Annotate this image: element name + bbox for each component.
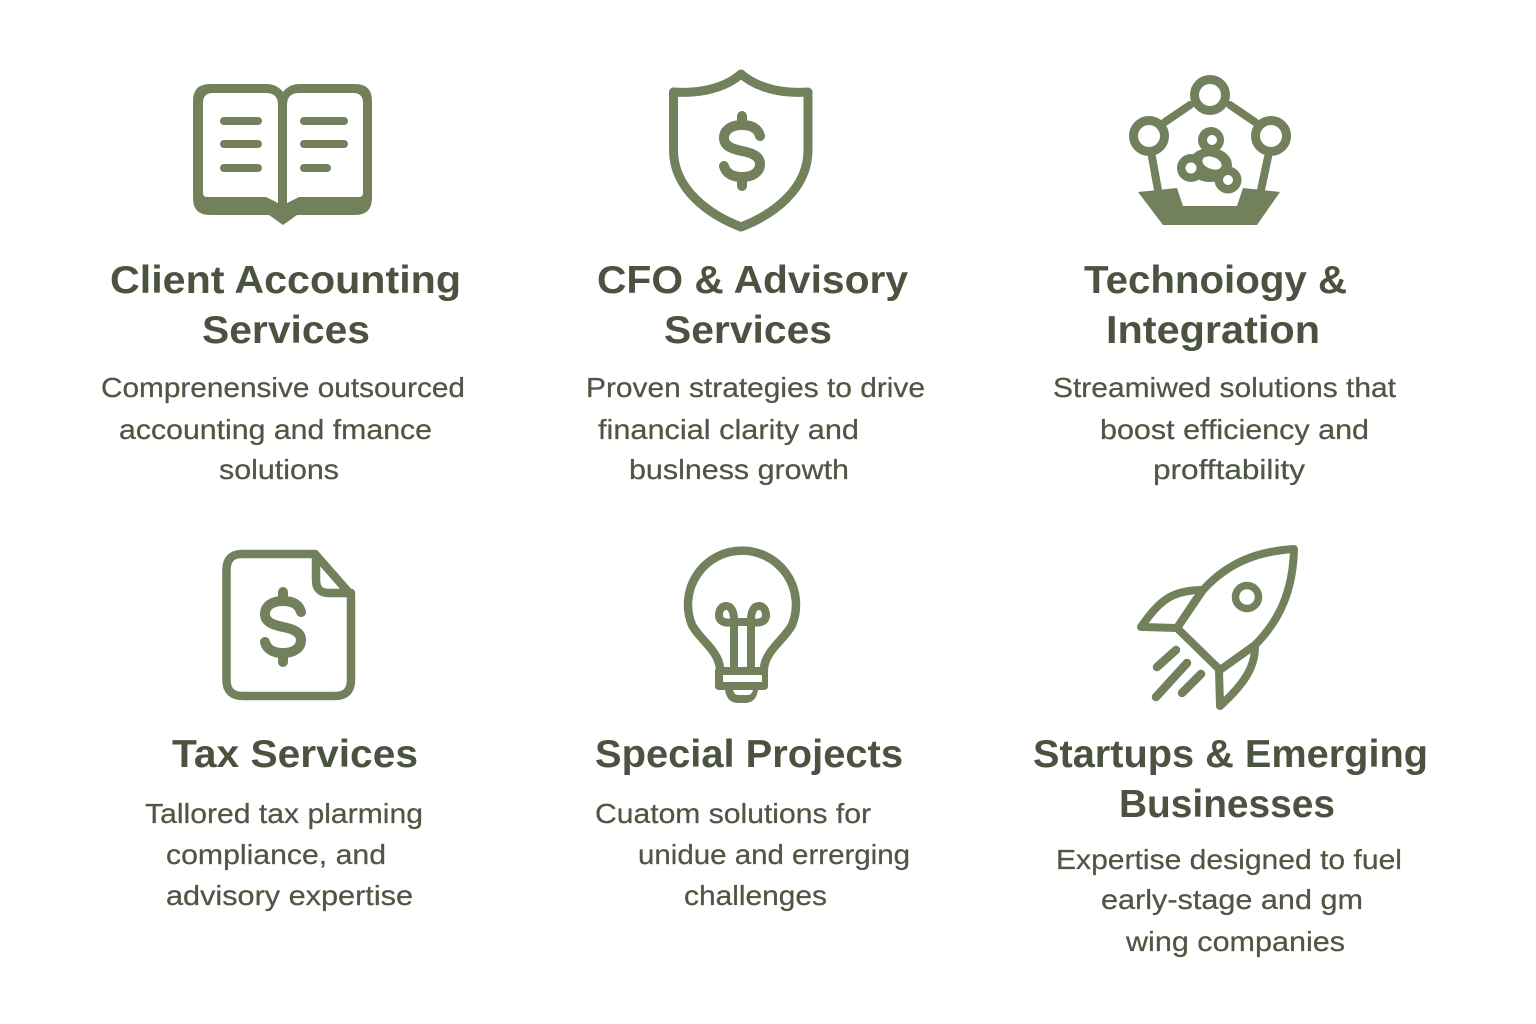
description: Proven strategies to drive <box>586 372 925 403</box>
panel: Technology & Integration <box>1053 80 1396 485</box>
description: advisory expertise <box>166 880 413 911</box>
panel: Client Accounting Services <box>101 84 465 485</box>
description <box>101 372 465 485</box>
description: solutions <box>219 454 339 485</box>
icon: open book <box>193 84 372 225</box>
description <box>586 372 925 485</box>
panel: Startups & Emerging Businesses <box>1033 549 1428 957</box>
heading <box>110 259 461 352</box>
description: Comprenensive outsourced <box>101 372 465 403</box>
description: early-stage and gm <box>1101 884 1363 915</box>
description: buslness growth <box>629 454 849 485</box>
heading: Integration <box>1106 309 1320 352</box>
description: Streamiwed solutions that <box>1053 372 1396 403</box>
heading: CFO & Advisory <box>597 259 908 302</box>
description: unidue and errerging <box>638 839 910 870</box>
icon: light bulb <box>688 551 796 703</box>
description: Tallored tax plarming <box>145 798 423 829</box>
description: wing companies <box>1125 926 1345 957</box>
heading: Startups & Emerging <box>1033 733 1428 776</box>
heading: Services <box>664 309 832 352</box>
description: compliance, and <box>166 839 386 870</box>
icon: rocket <box>1141 549 1294 706</box>
icon: connected network <box>1134 80 1286 225</box>
description: profftability <box>1153 454 1305 485</box>
heading <box>1084 259 1347 352</box>
heading: Businesses <box>1119 783 1335 826</box>
panel: Tax Services <box>145 554 423 911</box>
heading: Technoiogy & <box>1084 259 1347 302</box>
heading: Services <box>202 309 370 352</box>
description: challenges <box>684 880 827 911</box>
description: financial clarity and <box>598 414 859 445</box>
description: accounting and fmance <box>119 414 432 445</box>
description: Expertise designed to fuel <box>1056 844 1402 875</box>
description <box>1056 844 1402 957</box>
icon: shield with dollar <box>674 74 808 227</box>
heading: Tax Services <box>172 733 418 776</box>
description <box>1053 372 1396 485</box>
description <box>595 798 910 911</box>
panel: Special Projects <box>595 551 910 911</box>
description: boost efficiency and <box>1100 414 1369 445</box>
description <box>145 798 423 911</box>
panel: CFO & Advisory Services <box>586 74 925 485</box>
heading <box>597 259 908 352</box>
description: Cuatom solutions for <box>595 798 871 829</box>
heading <box>1033 733 1428 826</box>
heading: Special Projects <box>595 733 903 776</box>
icon: document with dollar <box>226 554 351 696</box>
heading: Client Accounting <box>110 259 461 302</box>
